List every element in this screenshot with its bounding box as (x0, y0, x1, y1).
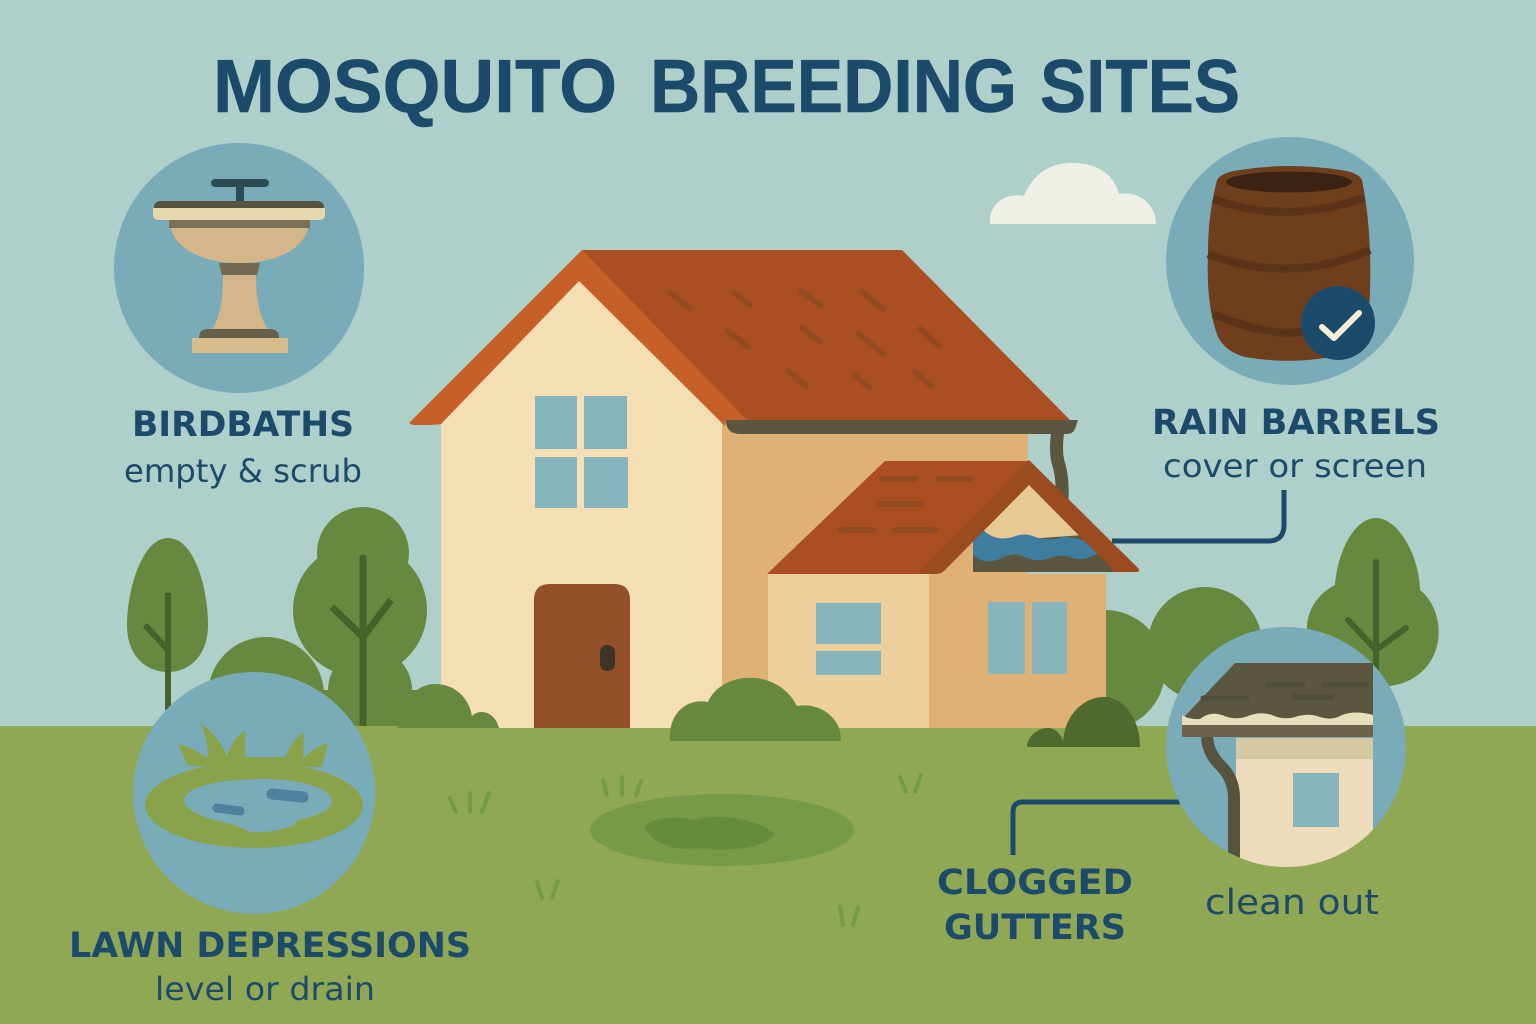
background trees left (127, 507, 427, 753)
grass tufts (450, 775, 921, 925)
title: MOSQUITO (213, 44, 617, 128)
connector: rain barrel (1112, 490, 1284, 541)
rain barrels label: RAIN BARRELS (1152, 403, 1440, 443)
gutter (726, 420, 1078, 434)
gable (973, 485, 1090, 572)
extension roof (767, 461, 1030, 574)
connector: gutters (1013, 802, 1180, 855)
background trees right (1045, 518, 1439, 730)
water in gutter (973, 530, 1098, 561)
rain barrels label: cover or screen (1163, 447, 1427, 485)
shrub right (1027, 697, 1140, 747)
clean out label: clean out (1205, 883, 1379, 923)
clogged gutters label: GUTTERS (944, 908, 1126, 948)
rain barrel icon (1166, 137, 1414, 385)
downspout (1056, 430, 1062, 500)
lawn depressions label: level or drain (155, 970, 375, 1008)
lawn depression icon (133, 672, 375, 914)
upper window (535, 396, 628, 508)
title (213, 44, 1240, 128)
title: SITES (1040, 44, 1240, 128)
clogged gutters label: CLOGGED (937, 863, 1133, 903)
extension wall (768, 574, 1106, 728)
rain barrels label (1152, 403, 1440, 485)
shrubs (670, 678, 841, 741)
birdbaths label (124, 405, 362, 490)
door knob (600, 645, 615, 671)
door (534, 584, 630, 728)
house (410, 250, 1139, 728)
lawn depressions label (69, 926, 471, 1008)
title: BREEDING (650, 44, 1017, 128)
main roof (582, 250, 1070, 420)
shrubs by door (398, 684, 499, 728)
side wall (722, 420, 1106, 728)
clogged gutter dark (973, 535, 1115, 572)
extension roof front band (917, 460, 1139, 574)
lawn (0, 726, 1536, 1024)
lawn depressions label: LAWN DEPRESSIONS (69, 926, 471, 966)
birdbaths label: BIRDBATHS (132, 405, 354, 445)
birdbaths label: empty & scrub (124, 452, 362, 490)
cloud (990, 163, 1156, 224)
birdbath icon (114, 143, 364, 393)
main wall (441, 280, 722, 728)
extension shingles (841, 479, 970, 530)
check badge (1301, 286, 1375, 360)
shingles (670, 291, 939, 388)
clogged gutters label (937, 863, 1133, 948)
roof edge (410, 250, 747, 426)
clogged gutter icon (1166, 627, 1406, 873)
extension windows (816, 602, 1067, 675)
lawn depression (590, 794, 854, 866)
